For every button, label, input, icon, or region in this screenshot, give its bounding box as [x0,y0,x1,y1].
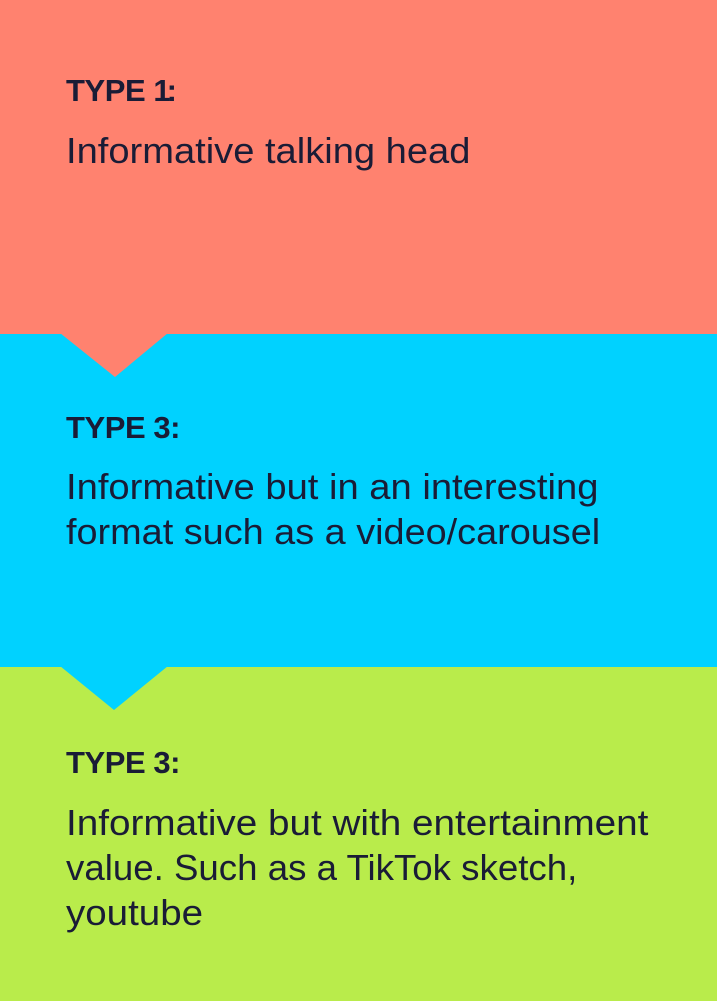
text: type 1 description: Informative talking head [66,130,470,171]
text: type 3 green description: Informative but with entertainment [66,802,648,843]
text: type 3 green description [66,802,648,933]
arrow: coral to blue [61,334,167,377]
text: type 3 green description: youtube [66,892,203,933]
text: type 3 blue description: Informative but in an interesting [66,466,598,507]
heading: type 3 blue: TYPE 3: [66,410,180,445]
panel: type 3 blue [0,334,717,667]
text: type 3 blue description: format such as a video/carousel [66,511,600,552]
arrow: blue to green [61,667,167,710]
panel: type 1 [0,0,717,334]
text: type 3 green description: value. Such as a TikTok sketch, [66,847,577,888]
panel: type 3 green [0,667,717,1001]
heading: type 1: TYPE 1: [66,73,176,108]
text: type 3 blue description [66,466,600,552]
heading: type 3 green: TYPE 3: [66,745,180,780]
